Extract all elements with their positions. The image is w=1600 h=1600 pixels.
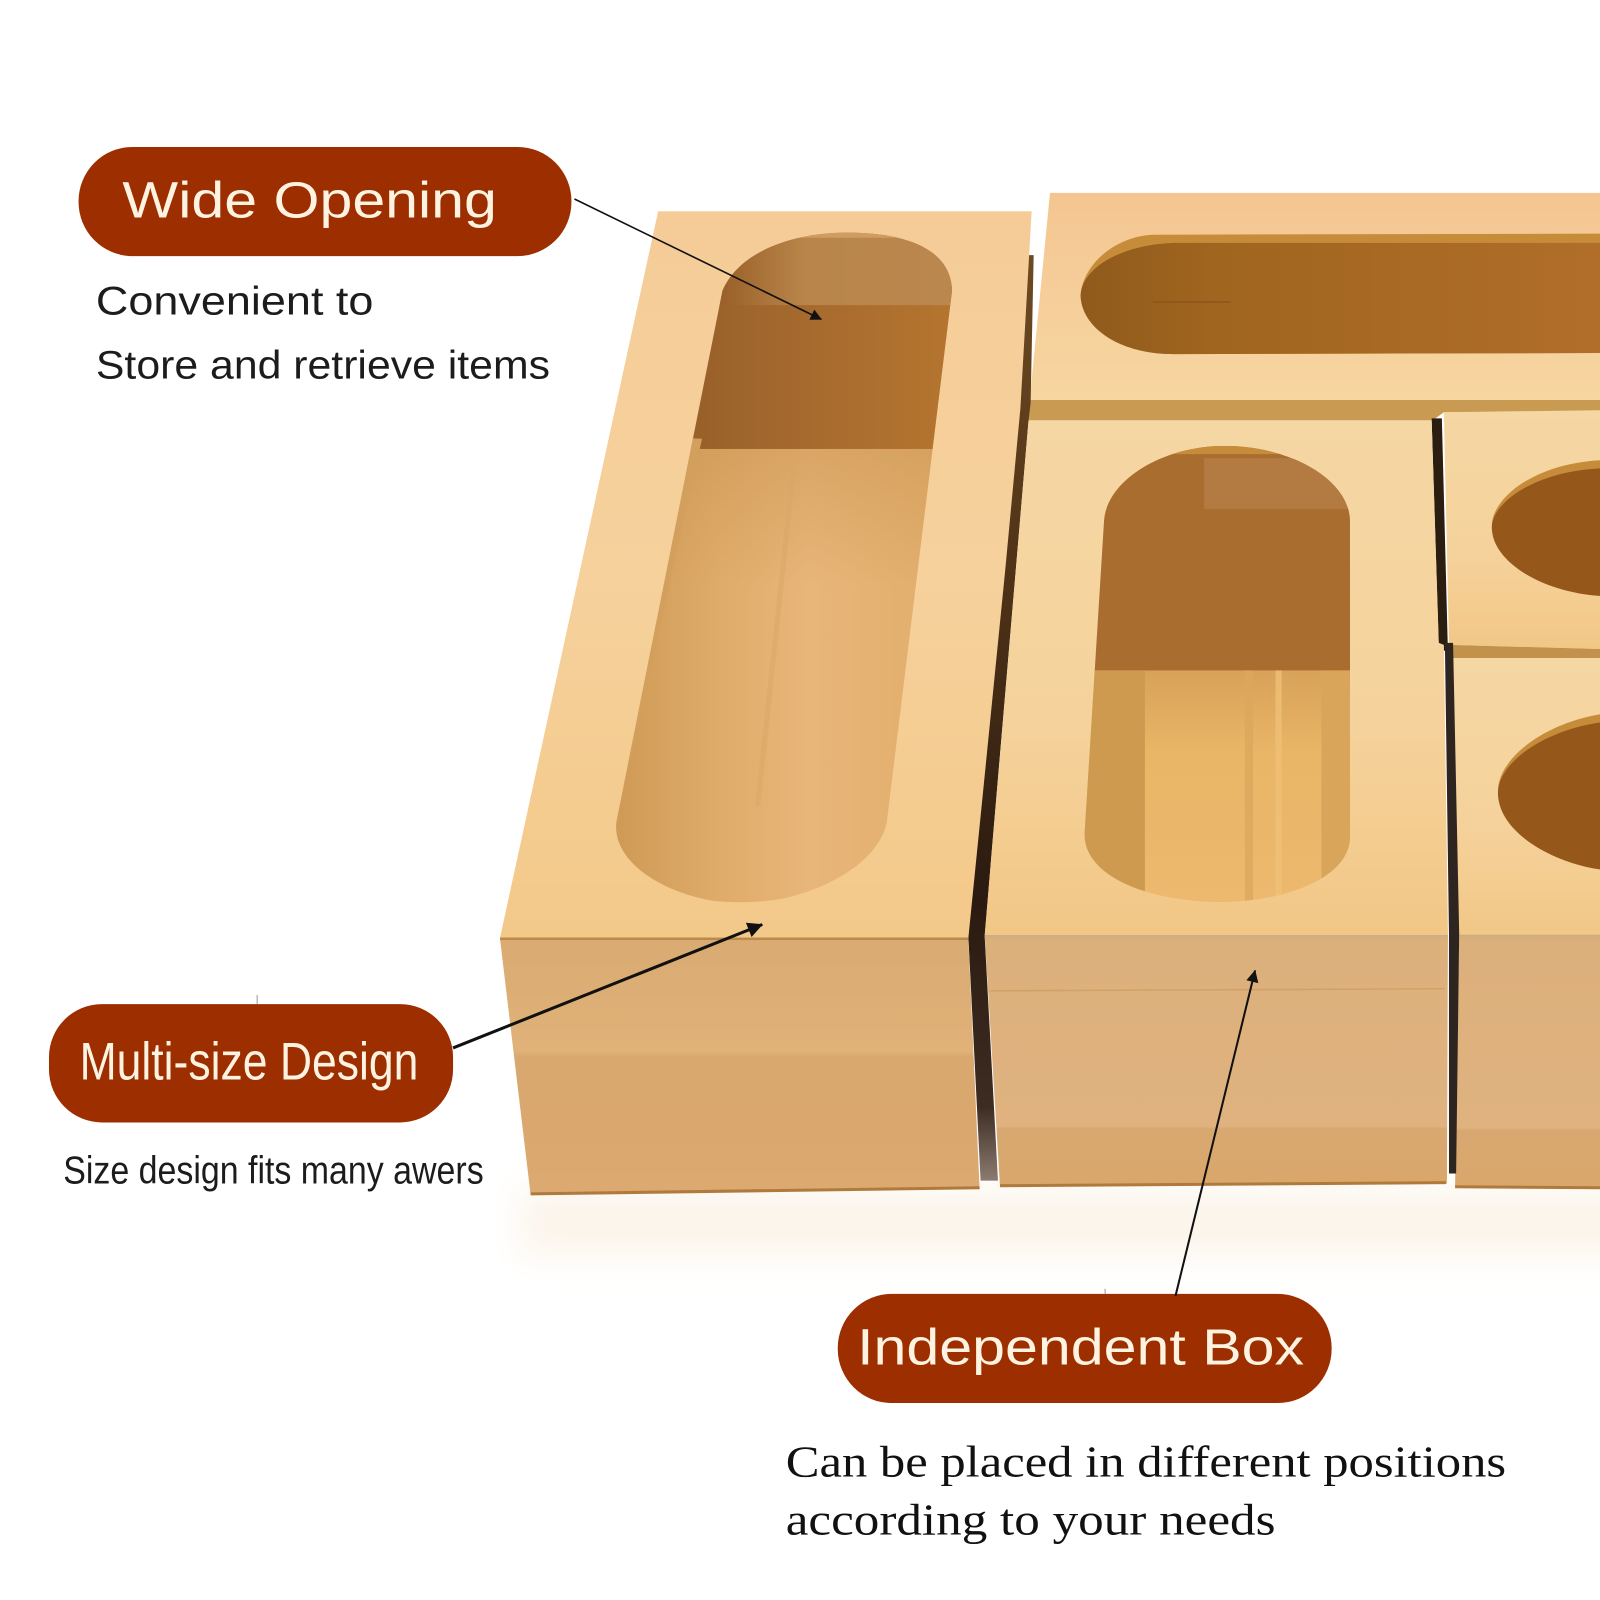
text: multi-size description: Size design fits many awers [63, 1150, 484, 1193]
text: wide opening description [96, 279, 550, 388]
text: independent box description: Can be placed in different positions [786, 1437, 1506, 1487]
text: wide opening description: Convenient to [96, 279, 373, 323]
text: independent box description [786, 1437, 1506, 1545]
top face [985, 420, 1448, 935]
wooden box: small lower right box [1452, 658, 1600, 1189]
text: independent box description: according to your needs [786, 1495, 1276, 1545]
text: wide opening description: Store and retrieve items [96, 344, 550, 388]
pill: Multi-size Design: Multi-size Design [80, 1033, 418, 1092]
wooden box: long back box [1027, 193, 1600, 420]
pill: Wide Opening [79, 147, 571, 256]
arrow: wide opening [574, 199, 821, 319]
pill: Independent Box [838, 1294, 1332, 1403]
floor shadow [520, 1189, 1600, 1255]
opening [602, 230, 969, 908]
opening [1077, 444, 1362, 905]
wooden box: small upper right box [1444, 410, 1600, 658]
pill: Wide Opening: Wide Opening [122, 171, 497, 228]
dark gaps between boxes [968, 255, 1459, 1181]
arrow: independent box [1176, 970, 1255, 1296]
pill: Multi-size Design [49, 1004, 453, 1122]
wooden box: independent middle box [985, 420, 1448, 1187]
front face [500, 939, 980, 1195]
pill: Independent Box: Independent Box [857, 1318, 1304, 1375]
wooden box: wide opening left box [500, 211, 1032, 1195]
arrow: multi-size [453, 924, 762, 1048]
front face [985, 935, 1448, 1187]
top face [500, 211, 1032, 938]
